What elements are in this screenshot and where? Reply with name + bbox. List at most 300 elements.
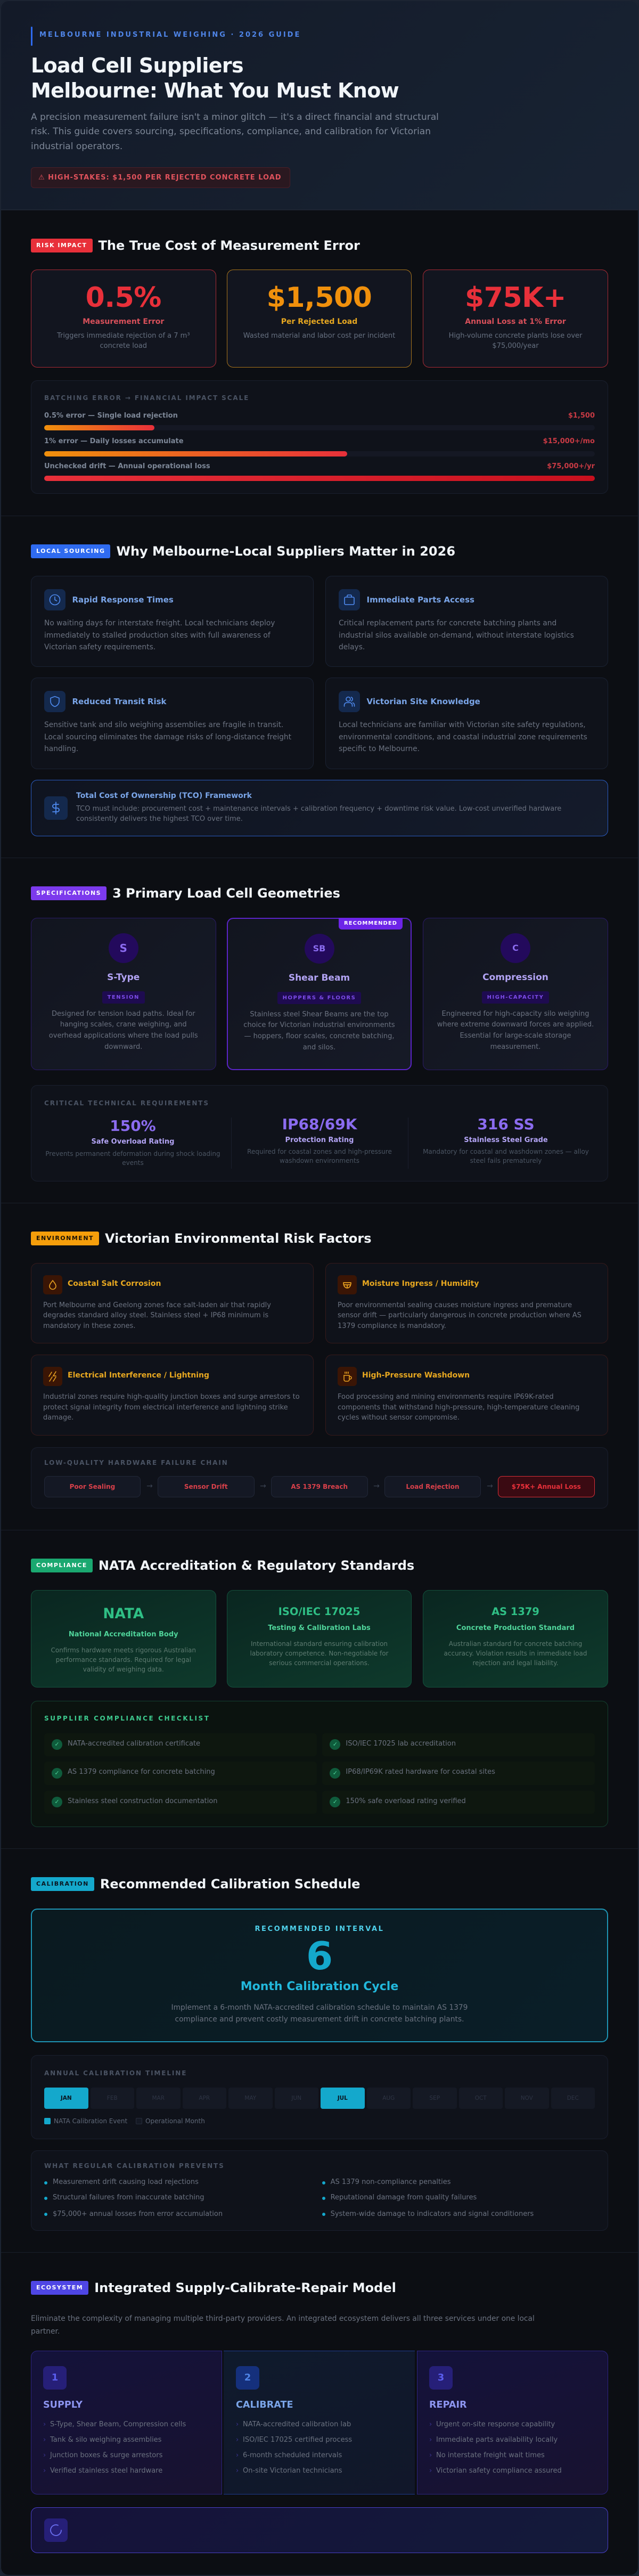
panel: recommended interval: Implement a 6-month NATA-accredited calibration schedule to maintain AS 1379 <box>171 2003 468 2012</box>
icon: drop <box>43 1275 62 1294</box>
month: APR <box>199 2095 210 2101</box>
panel: recommended interval: Month Calibration Cycle <box>241 1979 398 1993</box>
section: environment <box>0 1203 639 1530</box>
card: supply: SUPPLY <box>43 2400 83 2410</box>
title: Load Cell Suppliers <box>31 54 243 77</box>
arrow: → <box>260 1482 266 1490</box>
month <box>366 2088 411 2109</box>
spec: overload: events <box>122 1159 144 1167</box>
icon: briefcase <box>339 589 360 610</box>
service list: › <box>43 2451 46 2459</box>
card: washdown: High-Pressure Washdown <box>362 1371 470 1380</box>
spec: protection: washdown environments <box>280 1157 359 1164</box>
heading: Integrated Supply-Calibrate-Repair Model <box>94 2280 396 2295</box>
card: shear beam (recommended): — hoppers, floor scales, concrete batching, <box>244 1032 395 1040</box>
card: NATA: validity of weighing data. <box>83 1666 164 1673</box>
service list: › <box>43 2420 46 2428</box>
card: salt corrosion: Coastal Salt Corrosion <box>68 1279 161 1288</box>
intro text <box>31 112 439 152</box>
card: rapid response <box>31 576 314 667</box>
panel title: WHAT REGULAR CALIBRATION PREVENTS <box>44 2162 225 2170</box>
use tag: TENSION <box>108 994 140 1000</box>
card: parts access: Critical replacement parts for concrete batching plants and <box>339 619 556 627</box>
section: calibration <box>0 1848 639 2252</box>
card: rapid response: Victorian safety requirements. <box>44 643 155 651</box>
service list: Victorian safety compliance assured <box>436 2466 562 2475</box>
month: AUG <box>382 2095 395 2101</box>
card: ISO/IEC 17025: laboratory competence. Non-negotiable for <box>250 1650 389 1657</box>
step number <box>429 2366 453 2390</box>
checklist item: ✓ <box>54 1741 60 1748</box>
alert pill: ⚠ HIGH-STAKES: $1,500 PER REJECTED CONCRETE LOAD <box>38 174 282 182</box>
chain step: Sensor Drift <box>184 1483 228 1490</box>
service list: › <box>236 2451 239 2459</box>
panel: compliance checklist <box>31 1701 608 1827</box>
panel: recommended interval: compliance and prevent costly measurement drift in concrete batching plants. <box>175 2015 464 2024</box>
card: rapid response: immediately to stalled production sites with full awareness of <box>44 631 271 639</box>
icon: mug <box>338 1367 357 1386</box>
legend: Operational Month <box>145 2117 205 2125</box>
card: washdown <box>325 1355 608 1436</box>
card: rapid response: No waiting days for interstate freight. Local technicians deploy <box>44 619 275 627</box>
stat card: annual loss: Annual Loss at 1% Error <box>465 317 566 326</box>
icon: dollar <box>44 796 68 820</box>
card: compression: where extreme downward forces are applied. <box>437 1021 594 1029</box>
card: parts access: industrial silos available on-demand, without interstate logistics <box>339 631 574 639</box>
icon: shield <box>44 691 65 712</box>
use tag: HOPPERS & FLOORS <box>283 995 356 1001</box>
bar row: daily losses: $15,000+/mo <box>543 437 595 445</box>
legend <box>44 2117 205 2125</box>
stat card: annual loss: High-volume concrete plants lose over <box>449 332 582 340</box>
spec: overload: 150% <box>110 1117 156 1135</box>
service list <box>236 2420 352 2475</box>
heading: SPECIFICATIONS <box>36 890 101 896</box>
card: site knowledge <box>325 678 608 769</box>
card: site knowledge: Local technicians are familiar with Victorian site safety regulations, <box>339 721 586 729</box>
intro text: industrial operators. <box>31 141 122 152</box>
heading: NATA Accreditation & Regulatory Standards <box>99 1558 414 1573</box>
bar row: single load <box>44 412 595 430</box>
checklist item <box>44 1762 316 1785</box>
bar row: annual loss: Unchecked drift — Annual operational loss <box>44 462 210 470</box>
card: S-type <box>31 918 216 1070</box>
callout: TCO framework: Total Cost of Ownership (TCO) Framework <box>76 792 252 800</box>
checklist item: ISO/IEC 17025 lab accreditation <box>346 1740 456 1748</box>
heading: Why Melbourne-Local Suppliers Matter in 2026 <box>116 544 455 559</box>
card: washdown: components that withstand high-pressure, high-temperature cleaning <box>338 1404 579 1412</box>
bar row: daily losses: 1% error — Daily losses accumulate <box>44 437 184 445</box>
card: electrical: protect signal integrity from electrical interference and lightning strike <box>43 1404 288 1412</box>
bullet list: left: Measurement drift causing load rejections <box>53 2178 199 2186</box>
checklist item <box>44 1791 316 1814</box>
stat card: annual loss: $75,000/year <box>492 342 539 350</box>
card: AS 1379: rejection and legal liability. <box>473 1659 558 1667</box>
card: transit risk <box>31 678 314 769</box>
section: ecosystem <box>0 2252 639 2576</box>
intro text: partner. <box>31 2327 60 2336</box>
chain step: final loss: $75K+ Annual Loss <box>512 1483 581 1490</box>
service list: S-Type, Shear Beam, Compression cells <box>50 2420 186 2428</box>
month <box>91 2088 134 2109</box>
step number <box>236 2366 259 2390</box>
title <box>31 54 399 102</box>
spec: overload <box>45 1117 220 1167</box>
icon: S badge <box>109 933 138 963</box>
month: MAR <box>152 2095 165 2101</box>
stat card: annual loss <box>423 270 608 368</box>
card: transit risk: Local sourcing eliminates the damage risks of long-distance freight <box>44 733 291 741</box>
chain step <box>271 1476 367 1497</box>
bar row: single load: $1,500 <box>568 412 595 420</box>
service list: › <box>429 2451 432 2459</box>
chain step <box>384 1476 481 1497</box>
card: electrical: Industrial zones require high-quality junction boxes and surge arrestors to <box>43 1393 300 1401</box>
card: S-type: S-Type <box>107 972 140 983</box>
step number <box>43 2366 67 2390</box>
icon: C badge: C <box>512 943 519 953</box>
eyebrow: MELBOURNE INDUSTRIAL WEIGHING · 2026 GUIDE <box>39 31 301 39</box>
card: ISO/IEC 17025: International standard ensuring calibration <box>251 1640 388 1648</box>
icon: clock <box>44 589 65 610</box>
month: JAN <box>61 2095 72 2101</box>
month <box>321 2088 364 2109</box>
card: electrical: damage. <box>43 1414 73 1422</box>
stat card: per rejected load: Per Rejected Load <box>281 317 357 326</box>
checklist item <box>44 1733 316 1756</box>
icon: S badge: S <box>120 942 127 955</box>
month: JUL <box>338 2095 348 2101</box>
intro text: risk. This guide covers sourcing, specifications, compliance, and calibration for Victorian <box>31 126 431 137</box>
chain step: AS 1379 Breach <box>291 1483 348 1490</box>
month: NOV <box>521 2095 533 2101</box>
card: parts access: Immediate Parts Access <box>366 594 474 604</box>
month <box>551 2088 595 2109</box>
bar row: daily losses <box>44 437 595 456</box>
service list: On-site Victorian technicians <box>243 2466 342 2475</box>
use tag: HIGH-CAPACITY <box>487 994 544 1000</box>
section: specifications <box>0 858 639 1203</box>
bullet list: right: Reputational damage from quality failures <box>331 2194 477 2202</box>
callout: TCO framework: consistently delivers the highest TCO over time. <box>76 815 243 823</box>
stat card: measurement error: Measurement Error <box>83 317 164 326</box>
recommended tag: RECOMMENDED <box>344 920 397 926</box>
spec: steel grade: Mandatory for coastal and washdown zones — alloy <box>423 1148 589 1155</box>
service list: 6-month scheduled intervals <box>243 2451 342 2459</box>
card: ISO/IEC 17025 <box>227 1590 412 1688</box>
service list <box>429 2420 562 2475</box>
checklist item: IP68/IP69K rated hardware for coastal sites <box>346 1768 495 1776</box>
service list: NATA-accredited calibration lab <box>243 2420 351 2428</box>
stat card: annual loss: $75K+ <box>465 282 566 314</box>
icon: refresh ring <box>44 2518 68 2542</box>
panel: failure chain <box>31 1447 608 1509</box>
panel title: ANNUAL CALIBRATION TIMELINE <box>44 2069 187 2076</box>
card: compression: measurement. <box>490 1043 540 1051</box>
card: washdown: cycles without sensor compromise. <box>338 1414 460 1422</box>
panel title: CRITICAL TECHNICAL REQUIREMENTS <box>44 1099 209 1107</box>
service list: ISO/IEC 17025 certified process <box>243 2435 352 2444</box>
hero section <box>0 0 639 210</box>
card: S-type: Designed for tension load paths. Ideal for <box>52 1010 195 1018</box>
service list: Junction boxes & surge arrestors <box>50 2451 162 2459</box>
card: AS 1379: AS 1379 <box>491 1605 539 1617</box>
heading: ECOSYSTEM <box>36 2284 83 2291</box>
step number: 3 <box>438 2372 444 2383</box>
card: rapid response: Rapid Response Times <box>72 594 174 604</box>
month <box>228 2088 273 2109</box>
month: OCT <box>475 2095 487 2101</box>
card: compression: Engineered for high-capacity silo weighing <box>442 1010 589 1018</box>
callout: TCO framework: TCO must include: procurement cost + maintenance intervals + calibration frequency + downtime risk value. Low-cost unverified hardware <box>76 804 561 813</box>
card: salt corrosion: degrades standard alloy steel. Stainless steel + IP68 minimum is <box>43 1311 268 1319</box>
month: FEB <box>107 2095 118 2101</box>
card: shear beam (recommended): Shear Beam <box>289 973 350 983</box>
service list: › <box>236 2466 239 2475</box>
month: SEP <box>429 2095 440 2101</box>
spec: steel grade: 316 SS <box>477 1115 535 1133</box>
card: moisture: Poor environmental sealing causes moisture ingress and premature <box>338 1301 572 1309</box>
panel title: BATCHING ERROR → FINANCIAL IMPACT SCALE <box>44 394 249 402</box>
card: calibrate <box>224 2351 415 2495</box>
card: AS 1379 <box>423 1590 608 1688</box>
legend: NATA Calibration Event <box>54 2117 127 2125</box>
icon: C badge <box>501 933 530 963</box>
card: repair <box>417 2351 608 2495</box>
checklist item: NATA-accredited calibration certificate <box>68 1740 200 1748</box>
section: compliance <box>0 1530 639 1848</box>
bar row: single load: 0.5% error — Single load rejection <box>44 412 178 420</box>
panel: recommended interval: 6 <box>306 1934 333 1978</box>
bullet list: left: Structural failures from inaccurate batching <box>53 2194 204 2202</box>
heading: RISK IMPACT <box>36 242 87 249</box>
card: salt corrosion <box>31 1263 314 1343</box>
spec: steel grade: steel fails prematurely <box>470 1157 542 1164</box>
service list: Tank & silo weighing assemblies <box>50 2435 161 2444</box>
spec: protection: IP68/69K <box>282 1115 357 1133</box>
card: shear beam (recommended): Stainless steel Shear Beams are the top <box>250 1010 389 1018</box>
panel: recommended interval <box>31 1909 608 2042</box>
panel: what calibration prevents <box>31 2150 608 2231</box>
card: S-type: overhead applications where the load pulls <box>49 1032 198 1040</box>
card: salt corrosion: mandatory in these zones. <box>43 1322 135 1330</box>
chain step: final loss <box>498 1476 594 1497</box>
spec: steel grade: Stainless Steel Grade <box>464 1136 548 1144</box>
spec: overload: Safe Overload Rating <box>92 1138 174 1146</box>
service list <box>43 2420 186 2475</box>
eyebrow <box>31 27 301 46</box>
card: AS 1379: accuracy. Violation results in immediate load <box>444 1650 587 1657</box>
panel: annual timeline <box>31 2055 608 2139</box>
icon: SB badge <box>305 934 334 964</box>
card: ISO/IEC 17025: serious commercial operations. <box>269 1659 370 1667</box>
card: supply <box>31 2351 222 2495</box>
card: NATA: Confirms hardware meets rigorous Australian <box>51 1646 196 1654</box>
icon: lightning <box>43 1367 62 1386</box>
card: compression: Essential for large-scale storage <box>460 1032 571 1040</box>
spec: steel grade <box>423 1115 589 1164</box>
icon: cup <box>338 1275 357 1294</box>
card: transit risk: Reduced Transit Risk <box>72 697 167 706</box>
service list: › <box>236 2435 239 2444</box>
step number: 1 <box>52 2372 58 2383</box>
service list: Verified stainless steel hardware <box>50 2466 162 2475</box>
card: shear beam (recommended) <box>227 918 412 1070</box>
bar row: annual loss <box>44 462 595 481</box>
bullet list: left <box>44 2178 223 2218</box>
card: S-type: downward. <box>104 1043 142 1051</box>
arrow: → <box>487 1482 493 1490</box>
heading: 3 Primary Load Cell Geometries <box>112 886 340 901</box>
checklist item: ✓ <box>54 1770 60 1776</box>
heading: Recommended Calibration Schedule <box>100 1877 360 1892</box>
service list: › <box>429 2435 432 2444</box>
card: transit risk: handling. <box>44 745 78 753</box>
checklist item <box>322 1762 595 1785</box>
card: compression <box>423 918 608 1070</box>
service list: No interstate freight wait times <box>436 2451 545 2459</box>
card: parts access <box>325 576 608 667</box>
service list: › <box>43 2435 46 2444</box>
service list: Urgent on-site response capability <box>436 2420 555 2428</box>
heading: Victorian Environmental Risk Factors <box>105 1231 371 1246</box>
icon: SB badge: SB <box>313 943 325 953</box>
chain step <box>44 1476 141 1497</box>
stat card: per rejected load: $1,500 <box>267 282 372 314</box>
spec: protection: Protection Rating <box>285 1136 354 1144</box>
card: site knowledge: environmental conditions, and coastal industrial zone requirements <box>339 733 587 741</box>
month: DEC <box>567 2095 579 2101</box>
card: salt corrosion: Port Melbourne and Geelong zones face salt-laden air that rapidly <box>43 1301 271 1309</box>
card: NATA: NATA <box>103 1605 144 1622</box>
panel: recommended interval: RECOMMENDED INTERVAL <box>255 1925 384 1933</box>
chain step: Load Rejection <box>406 1483 459 1490</box>
month <box>459 2088 503 2109</box>
intro text: A precision measurement failure isn't a minor glitch — it's a direct financial and structural <box>31 112 439 123</box>
stat card: per rejected load: Wasted material and labor cost per incident <box>243 332 395 340</box>
checklist item: ✓ <box>333 1798 338 1805</box>
intro text: Eliminate the complexity of managing multiple third-party providers. An integrated ecosystem delivers all three services under one local <box>31 2314 535 2322</box>
chain step: Poor Sealing <box>70 1483 115 1490</box>
card: moisture: 1379 compliance is mandatory. <box>338 1322 446 1330</box>
checklist item <box>322 1791 595 1814</box>
title: Melbourne: What You Must Know <box>31 79 399 102</box>
service list: › <box>43 2466 46 2475</box>
stat card: measurement error <box>31 270 216 368</box>
banner: integrated model <box>31 2507 608 2553</box>
month <box>275 2088 318 2109</box>
card: moisture: Moisture Ingress / Humidity <box>362 1279 479 1288</box>
heading: COMPLIANCE <box>36 1562 87 1569</box>
stat card: measurement error: concrete load <box>100 342 147 350</box>
checklist item: ✓ <box>333 1741 338 1748</box>
checklist item: ✓ <box>333 1770 338 1776</box>
checklist item: Stainless steel construction documentation <box>68 1797 217 1805</box>
service list: › <box>236 2420 239 2428</box>
card: parts access: delays. <box>339 643 365 651</box>
month <box>182 2088 226 2109</box>
card: site knowledge: Victorian Site Knowledge <box>366 697 480 706</box>
checklist item <box>322 1733 595 1756</box>
card: shear beam (recommended): and silos. <box>303 1044 335 1051</box>
bullet list: right <box>322 2178 534 2218</box>
card: electrical: Electrical Interference / Lightning <box>68 1371 209 1380</box>
callout: TCO framework <box>31 780 608 836</box>
panel: financial impact scale <box>31 380 608 494</box>
card: S-type: hanging scales, crane weighing, and <box>60 1021 187 1029</box>
panel: technical requirements <box>31 1085 608 1181</box>
alert pill <box>31 167 290 188</box>
card: AS 1379: Australian standard for concrete batching <box>449 1640 582 1648</box>
arrow: → <box>146 1482 153 1490</box>
heading: LOCAL SOURCING <box>36 548 105 555</box>
checklist item: ✓ <box>54 1798 60 1805</box>
card: calibrate: CALIBRATE <box>236 2400 293 2410</box>
stat card: measurement error: 0.5% <box>86 282 161 314</box>
card: NATA <box>31 1590 216 1688</box>
service list: Immediate parts availability locally <box>436 2435 558 2444</box>
month <box>413 2088 457 2109</box>
card: ISO/IEC 17025: ISO/IEC 17025 <box>278 1605 360 1617</box>
month <box>136 2088 180 2109</box>
stat card: measurement error: Triggers immediate rejection of a 7 m³ <box>57 332 190 340</box>
card: washdown: Food processing and mining environments require IP69K-rated <box>338 1393 554 1401</box>
month: MAY <box>244 2095 256 2101</box>
spec: overload: Prevents permanent deformation during shock loading <box>45 1150 220 1157</box>
card: transit risk: Sensitive tank and silo weighing assemblies are fragile in transit. <box>44 721 283 729</box>
bullet list: right: AS 1379 non-compliance penalties <box>331 2178 450 2186</box>
card: repair: REPAIR <box>429 2400 467 2410</box>
panel title: LOW-QUALITY HARDWARE FAILURE CHAIN <box>44 1459 228 1466</box>
service list: › <box>429 2466 432 2475</box>
card: moisture <box>325 1263 608 1343</box>
chain step <box>158 1476 255 1497</box>
panel title: SUPPLIER COMPLIANCE CHECKLIST <box>44 1715 210 1722</box>
month <box>505 2088 548 2109</box>
month: JUN <box>291 2095 301 2101</box>
stat card: per rejected load <box>227 270 412 368</box>
icon: users <box>339 691 360 712</box>
card: NATA: performance standards. Required for legal <box>56 1656 191 1664</box>
heading: The True Cost of Measurement Error <box>99 238 360 253</box>
service list: › <box>429 2420 432 2428</box>
card: electrical <box>31 1355 314 1436</box>
bullet list: left: $75,000+ annual losses from error accumulation <box>53 2210 223 2218</box>
card: moisture: sensor drift — particularly dangerous in concrete production where AS <box>338 1311 581 1319</box>
card: compression: Compression <box>482 972 548 983</box>
month <box>44 2088 88 2109</box>
section: local sourcing <box>0 516 639 858</box>
card: shear beam (recommended): choice for Victorian industrial environments <box>243 1021 395 1029</box>
heading: CALIBRATION <box>36 1880 89 1887</box>
section: risk impact <box>0 210 639 516</box>
checklist item: AS 1379 compliance for concrete batching <box>68 1768 215 1776</box>
step number: 2 <box>244 2372 251 2383</box>
bar row: annual loss: $75,000+/yr <box>547 462 595 470</box>
card: NATA: National Accreditation Body <box>69 1631 178 1638</box>
spec: protection: Required for coastal zones and high-pressure <box>247 1148 392 1155</box>
intro text <box>31 2314 535 2336</box>
heading: ENVIRONMENT <box>36 1235 94 1242</box>
card: site knowledge: specific to Melbourne. <box>339 745 420 753</box>
card: ISO/IEC 17025: Testing & Calibration Labs <box>268 1624 371 1632</box>
spec: protection <box>247 1115 392 1164</box>
checklist item: 150% safe overload rating verified <box>346 1797 466 1805</box>
bullet list: right: System-wide damage to indicators and signal conditioners <box>331 2210 534 2218</box>
recommended tag <box>339 918 403 930</box>
arrow: → <box>373 1482 380 1490</box>
card: AS 1379: Concrete Production Standard <box>456 1624 575 1632</box>
